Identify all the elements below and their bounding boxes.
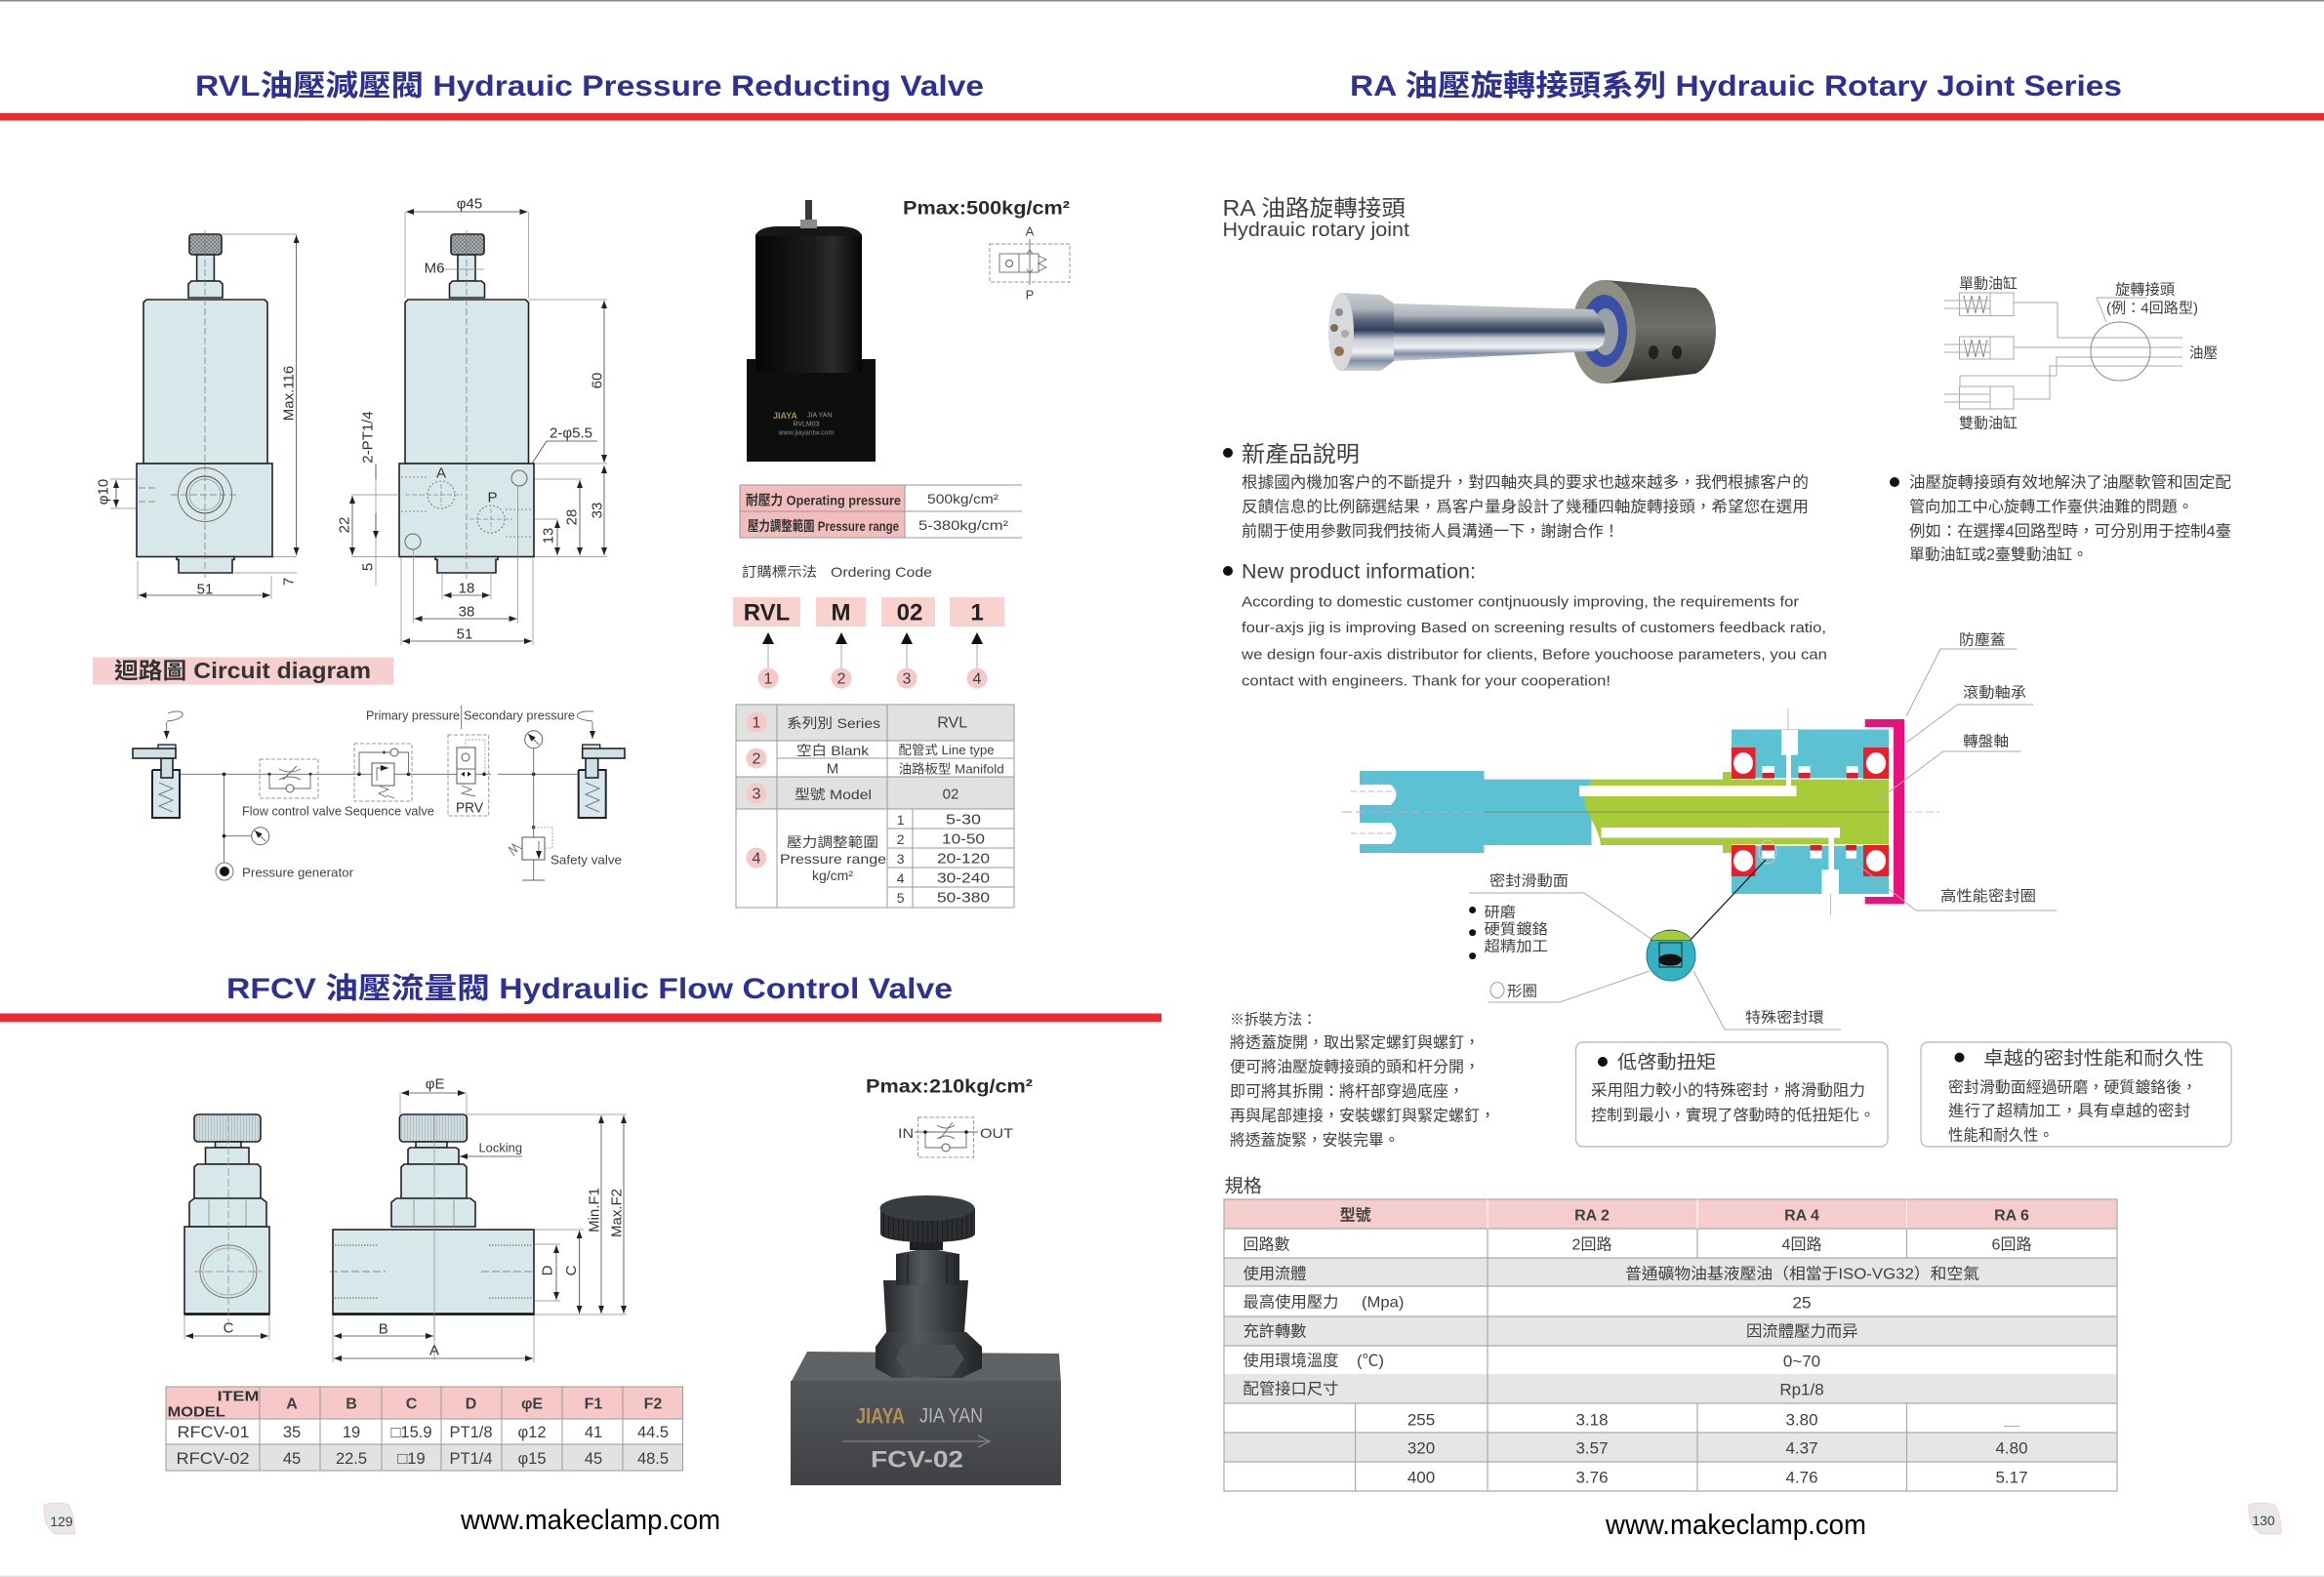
- icon: RVL valve symbol: [990, 224, 1070, 303]
- table: RA specifications: 最高使用壓力: [1244, 1294, 1339, 1312]
- label: sequence valve: Sequence valve: [345, 804, 434, 819]
- diagram: rotary joint cross-section: [1342, 649, 2057, 1030]
- table: RFCV dimensions: φE: [521, 1396, 543, 1413]
- panel: sealing and durability: 密封滑動面經過研磨，硬質鍍鉻後，: [1948, 1078, 2197, 1096]
- panel: low starting torque: 采用阻力較小的特殊密封，將滑動阻力: [1591, 1082, 1865, 1100]
- table: RFCV dimensions: [166, 1387, 683, 1471]
- icon: flow valve symbol: [898, 1117, 1014, 1157]
- circuit diagram: [133, 706, 625, 880]
- dim: A: A: [429, 1343, 439, 1359]
- heading: specifications: 規格: [1225, 1176, 1262, 1197]
- panel: low starting torque: 控制到最小，實現了啓動時的低扭矩化。: [1591, 1106, 1875, 1124]
- list: surface finishes: 研磨: [1484, 905, 1516, 921]
- icon: flow valve symbol: OUT: [980, 1125, 1014, 1141]
- table: RFCV dimensions: φ12: [517, 1424, 547, 1441]
- table: ordering code details: [736, 705, 1014, 908]
- drawing: RVL front view: [96, 230, 297, 599]
- icon: safety valve: [509, 748, 552, 880]
- table: ordering code details: 10-50: [942, 831, 985, 848]
- label: primary pressure: Primary pressure: [366, 708, 460, 723]
- table: RA specifications: 0~70: [1783, 1352, 1820, 1370]
- label: Locking: Locking: [478, 1141, 522, 1155]
- table: ordering code details: 02: [943, 787, 958, 803]
- table: RA specifications: —: [2004, 1418, 2019, 1435]
- callout: O-ring: [1490, 983, 1537, 1000]
- dim: Min.F1: Min.F1: [586, 1188, 603, 1233]
- table: RFCV dimensions: RFCV-02: [176, 1450, 250, 1468]
- label: PRV: PRV: [456, 800, 483, 817]
- schematic: cylinders and rotary joint: [1944, 275, 2218, 432]
- dim: 18: 18: [459, 581, 474, 597]
- dim: 2-phi 5.5: 2-φ5.5: [550, 425, 592, 442]
- photo: black RVL valve: www.jiayantw.com: [778, 430, 835, 437]
- text block: disassembly method: 將透蓋旋緊，安裝完畢。: [1230, 1132, 1400, 1150]
- table: RA specifications: 3.76: [1575, 1469, 1609, 1487]
- photo: FCV-02 flow control valve: JIAYA: [856, 1404, 905, 1429]
- table: ordering code details: 4: [753, 851, 761, 868]
- panel: sealing and durability: [1921, 1042, 2231, 1147]
- heading: Pmax 210: Pmax:210kg/cm²: [866, 1077, 1033, 1098]
- text block: disassembly method: 將透蓋旋開，取出緊定螺釘與螺釘，: [1230, 1034, 1480, 1052]
- table: RA specifications: RA 4: [1784, 1208, 1819, 1225]
- page number 129: [44, 1503, 74, 1534]
- table: pressure ratings: 5-380kg/cm²: [918, 517, 1008, 533]
- detail: seal circle: [1647, 930, 1695, 981]
- table: RFCV dimensions: F2: [644, 1396, 662, 1413]
- table: ordering code details: 4: [897, 870, 905, 886]
- callout: rotary shaft: 轉盤軸: [1963, 733, 2009, 749]
- dim: phi E: φE: [426, 1076, 444, 1093]
- table: pressure ratings: [740, 485, 1022, 538]
- icon: flow valve symbol: IN: [898, 1125, 914, 1141]
- drawing: RFCV front view: [184, 1114, 269, 1340]
- label: pressure generator: Pressure generator: [242, 866, 354, 880]
- table: ordering code details: 油路板型 Manifold: [899, 762, 1004, 777]
- table: ordering code details: 3: [753, 787, 761, 803]
- red header bar: [0, 113, 2324, 121]
- table: RFCV dimensions: □15.9: [390, 1424, 432, 1441]
- heading: RA rotary joint: [1222, 195, 1409, 241]
- table: RFCV dimensions: ITEM: [218, 1389, 259, 1405]
- label: hydraulic pressure: 油壓: [2189, 345, 2218, 362]
- icon: PRV valve: [448, 735, 489, 816]
- table: RFCV dimensions: PT1/4: [449, 1450, 493, 1468]
- label: single acting cylinder: 單動油缸: [1959, 275, 2018, 293]
- table: RFCV dimensions: 45: [585, 1450, 602, 1468]
- table: ordering code details: 3: [897, 851, 905, 867]
- table: RA specifications: 4.80: [1995, 1439, 2028, 1458]
- table: ordering code details: 50-380: [937, 890, 990, 907]
- page number 129: 129: [50, 1514, 73, 1529]
- heading: ordering code: 訂購標示法: [742, 564, 817, 580]
- ordering code boxes: [733, 597, 1004, 627]
- table: RA specifications: 使用流體: [1244, 1265, 1306, 1282]
- photo: black RVL valve: JIAYA: [773, 411, 797, 421]
- table: RFCV dimensions: 41: [585, 1424, 602, 1441]
- photo: rotary joint: [1328, 280, 1716, 384]
- table: RA specifications: 25: [1793, 1294, 1811, 1313]
- icon: pressure gauges: [252, 731, 543, 845]
- icon: left clamp cylinder: [133, 711, 183, 818]
- text block: new product information English: According to domestic customer contjnuously improving, the requirements for: [1242, 594, 1799, 611]
- ordering code boxes: 02: [897, 600, 922, 627]
- table: ordering code details: 5: [897, 890, 905, 906]
- ordering code boxes: M: [832, 600, 851, 627]
- label: rotary joint: 旋轉接頭: [2115, 282, 2175, 299]
- callout: special seal ring: 特殊密封環: [1745, 1010, 1824, 1027]
- callout: seal sliding surface: 密封滑動面: [1489, 873, 1569, 890]
- table: ordering code details: 1: [753, 715, 761, 732]
- panel: sealing and durability: 性能和耐久性。: [1948, 1127, 2054, 1145]
- text block: disassembly method: ※拆裝方法：: [1230, 1012, 1317, 1029]
- website link left: www.makeclamp.com: [460, 1505, 720, 1536]
- table: RA specifications: RA 2: [1574, 1208, 1610, 1225]
- heading: ordering code: [742, 564, 932, 580]
- table: RA specifications: (℃): [1357, 1353, 1384, 1369]
- dim: phi 45: φ45: [457, 196, 482, 213]
- dim: 13: 13: [541, 528, 556, 544]
- text block: disassembly method: 便可將油壓旋轉接頭的頭和杆分開，: [1230, 1059, 1480, 1076]
- port label P: P: [487, 490, 498, 506]
- table: RA specifications: 4.76: [1785, 1469, 1818, 1487]
- text block: new product description Chinese: 新產品說明: [1242, 441, 1360, 466]
- dim: 5: 5: [359, 563, 377, 571]
- heading: Pmax 500: Pmax:500kg/cm²: [903, 199, 1070, 220]
- table: RA specifications: 4.37: [1785, 1439, 1818, 1458]
- table: RFCV dimensions: A: [286, 1396, 298, 1413]
- ordering code arrows and numbered circles: 3: [903, 671, 912, 688]
- table: ordering code details: kg/cm²: [812, 868, 853, 883]
- table: RA specifications: 2回路: [1572, 1235, 1611, 1253]
- label: double acting cylinder: 雙動油缸: [1959, 415, 2018, 432]
- dim: 2-PT1/4: 2-PT1/4: [359, 411, 377, 464]
- icon: RVL valve symbol: A: [1026, 224, 1035, 239]
- text block: disassembly method: 再與尾部連接，安裝螺釘與緊定螺釘，: [1230, 1108, 1495, 1125]
- dim: 33: 33: [590, 503, 605, 518]
- table: RFCV dimensions: 35: [283, 1424, 301, 1441]
- table: ordering code details: 30-240: [937, 870, 990, 887]
- table: pressure ratings: 500kg/cm²: [927, 491, 999, 506]
- icon: pressure generator: [216, 863, 233, 880]
- text block: new product information English: New product information:: [1242, 561, 1476, 584]
- text block: hydraulic joint benefit: 例如：在選擇4回路型時，可分別用于控制4臺: [1909, 523, 2231, 541]
- table: RA specifications: 400: [1407, 1469, 1435, 1487]
- dim: 51 lower: 51: [457, 627, 472, 643]
- table: RA specifications: 使用環境溫度: [1244, 1351, 1339, 1369]
- text block: new product description Chinese: 前關于使用參數同我們技術人員溝通一下，謝謝合作！: [1242, 523, 1619, 541]
- table: ordering code details: 配管式 Line type: [899, 743, 995, 757]
- table: RA specifications: 5.17: [1995, 1469, 2028, 1487]
- table: ordering code details: 2: [753, 751, 761, 768]
- table: RA specifications: 6回路: [1992, 1235, 2031, 1253]
- table: pressure ratings: 耐壓力 Operating pressure: [746, 493, 901, 508]
- dim: Max.116: Max.116: [281, 366, 297, 421]
- table: RFCV dimensions: F1: [585, 1396, 602, 1413]
- table: ordering code details: 空白 Blank: [796, 743, 870, 758]
- photo: FCV-02 flow control valve: [791, 1195, 1061, 1485]
- photo: black RVL valve: JIA YAN: [807, 413, 832, 420]
- photo: black RVL valve: RVLM03: [793, 422, 820, 428]
- text block: new product description Chinese: 反饋信息的比例篩選結果，爲客户量身設計了幾種四軸旋轉接頭，希望您在選用: [1242, 498, 1809, 516]
- text block: new product information English: we design four-axis distributor for clients, Before youchoose parameters, you can: [1241, 647, 1827, 664]
- icon: sequence valve: [354, 744, 412, 801]
- heading: RA rotary joint: RA 油路旋轉接頭: [1222, 195, 1406, 221]
- icon: right clamp cylinder: [577, 711, 625, 818]
- ordering code boxes: RVL: [744, 600, 790, 627]
- text block: disassembly method: 即可將其拆開：將杆部穿過底座，: [1230, 1083, 1464, 1101]
- title: RVL pressure reducing valve: RVL油壓減壓閥 Hydrauic Pressure Reducting Valve: [195, 70, 984, 102]
- text block: disassembly method: [1230, 1012, 1495, 1150]
- table: RFCV dimensions: 45: [283, 1450, 301, 1468]
- dim: Max.F2: Max.F2: [609, 1189, 625, 1237]
- table: RA specifications: 型號: [1340, 1207, 1371, 1225]
- panel: low starting torque: [1576, 1042, 1888, 1147]
- table: RA specifications: RA 6: [1994, 1208, 2029, 1225]
- table: RFCV dimensions: 22.5: [336, 1450, 367, 1468]
- photo: FCV-02 flow control valve: FCV-02: [871, 1447, 963, 1474]
- dim: 51: 51: [197, 582, 213, 598]
- port label A: A: [436, 465, 446, 482]
- dim: phi 10: φ10: [96, 479, 111, 505]
- table: ordering code details: 1: [897, 812, 905, 828]
- dim: M6: M6: [425, 261, 444, 277]
- table: ordering code details: Pressure range: [780, 851, 886, 867]
- drawing: RFCV side view: [330, 1076, 627, 1362]
- label: secondary pressure: Secondary pressure: [464, 708, 575, 723]
- ordering code boxes: 1: [970, 600, 984, 627]
- page number 130: [2249, 1503, 2281, 1534]
- table: ordering code details: 20-120: [937, 851, 990, 868]
- title: RA rotary joint series: RA 油壓旋轉接頭系列 Hydrauic Rotary Joint Series: [1350, 70, 2122, 102]
- panel: sealing and durability: 進行了超精加工，具有卓越的密封: [1948, 1103, 2190, 1120]
- photo: FCV-02 flow control valve: JIA YAN: [919, 1405, 983, 1428]
- table: ordering code details: 5-30: [946, 812, 981, 829]
- table: RA specifications: 320: [1407, 1439, 1435, 1458]
- table: RA specifications: 3.80: [1785, 1411, 1818, 1430]
- heading: RA rotary joint: Hydrauic rotary joint: [1222, 220, 1409, 241]
- drawing: RVL side view: [336, 196, 607, 645]
- label: flow control valve: Flow control valve: [242, 804, 342, 819]
- table: RFCV dimensions: φ15: [517, 1450, 547, 1468]
- table: ordering code details: 型號 Model: [795, 787, 872, 802]
- table: RFCV dimensions: 19: [343, 1424, 360, 1441]
- callout: O-ring: 形圈: [1507, 984, 1537, 1000]
- list: surface finishes: 超精加工: [1484, 939, 1548, 955]
- icon: flow control valve: [260, 759, 318, 798]
- table: RA specifications: [1224, 1199, 2117, 1491]
- table: RFCV dimensions: D: [466, 1396, 476, 1413]
- dim: 7: 7: [281, 578, 297, 586]
- heading: circuit diagram: 迴路圖 Circuit diagram: [114, 658, 371, 683]
- dim: 22: 22: [336, 517, 353, 533]
- dim: B: B: [379, 1321, 388, 1338]
- ordering code arrows and numbered circles: 2: [837, 671, 846, 688]
- table: RFCV dimensions: 48.5: [637, 1450, 669, 1468]
- label: safety valve: Safety valve: [550, 853, 622, 868]
- text block: new product information English: four-axjs jig is improving Based on screening results of customers feedback ratio,: [1242, 620, 1826, 636]
- dim: D: D: [539, 1265, 556, 1275]
- text block: new product information English: [1223, 561, 1827, 690]
- table: RFCV dimensions: □19: [397, 1450, 426, 1468]
- callout: high performance seal: 高性能密封圈: [1940, 888, 2036, 905]
- table: RFCV dimensions: MODEL: [168, 1403, 225, 1420]
- page number 130: 130: [2252, 1513, 2275, 1528]
- table: RFCV dimensions: C: [406, 1396, 418, 1413]
- ordering code arrows and numbered circles: 1: [764, 671, 773, 688]
- table: RA specifications: Rp1/8: [1779, 1381, 1824, 1399]
- text block: new product description Chinese: [1223, 441, 1809, 541]
- dim: C height: C: [563, 1265, 580, 1275]
- dim: 38: 38: [459, 604, 474, 621]
- title: RFCV flow control valve: RFCV 油壓流量閥 Hydraulic Flow Control Valve: [226, 973, 953, 1005]
- text block: hydraulic joint benefit: 管向加工中心旋轉工作臺供油難的問題。: [1909, 498, 2193, 516]
- table: ordering code details: 系列別 Series: [787, 715, 880, 731]
- panel: low starting torque: 低啓動扭矩: [1617, 1052, 1716, 1073]
- table: RFCV dimensions: PT1/8: [449, 1424, 493, 1441]
- website link right: www.makeclamp.com: [1605, 1510, 1866, 1541]
- label: 4-circuit example: (例：4回路型): [2106, 301, 2198, 317]
- dim: 60: 60: [590, 373, 605, 388]
- text block: hydraulic joint benefit: [1890, 473, 2231, 564]
- panel: sealing and durability: 卓越的密封性能和耐久性: [1983, 1048, 2204, 1070]
- table: RFCV dimensions: B: [346, 1396, 357, 1413]
- dim: 28: 28: [564, 509, 580, 525]
- heading: ordering code: Ordering Code: [831, 564, 932, 580]
- table: pressure ratings: 壓力調整範圍 Pressure range: [748, 518, 899, 534]
- table: RA specifications: 普通礦物油基液壓油（相當于ISO-VG32）和空氣: [1625, 1264, 1979, 1282]
- table: RFCV dimensions: 44.5: [637, 1424, 669, 1441]
- text block: new product description Chinese: 根據國內機加客户的不斷提升，對四軸夾具的要求也越來越多，我們根據客户的: [1242, 474, 1809, 492]
- table: RA specifications: 3.18: [1575, 1411, 1609, 1430]
- ordering code arrows and numbered circles: 4: [973, 671, 982, 688]
- table: RA specifications: 配管接口尺寸: [1244, 1380, 1339, 1398]
- table: RA specifications: 3.57: [1575, 1439, 1609, 1458]
- icon: RVL valve symbol: P: [1026, 288, 1034, 303]
- text block: hydraulic joint benefit: 單動油缸或2臺雙動油缸。: [1909, 546, 2088, 564]
- text block: new product information English: contact with engineers. Thank for your cooperation!: [1242, 673, 1610, 690]
- table: ordering code details: 壓力調整範圍: [787, 834, 878, 850]
- list: surface finishes: [1469, 905, 1548, 959]
- table: RA specifications: 4回路: [1782, 1235, 1821, 1253]
- table: ordering code details: RVL: [937, 715, 967, 732]
- table: RA specifications: 因流體壓力而异: [1746, 1322, 1858, 1340]
- red section bar: [0, 1013, 1162, 1022]
- callout: rolling bearing: 滾動軸承: [1963, 685, 2026, 702]
- table: ordering code details: M: [827, 761, 838, 778]
- table: RA specifications: 回路數: [1244, 1235, 1290, 1253]
- table: RA specifications: (Mpa): [1362, 1295, 1404, 1312]
- callout: dust cover: 防塵蓋: [1959, 631, 2006, 649]
- table: RA specifications: 充許轉數: [1244, 1322, 1306, 1340]
- table: ordering code details: 2: [897, 831, 905, 847]
- list: surface finishes: 硬質鍍鉻: [1484, 920, 1548, 938]
- table: RA specifications: 255: [1407, 1411, 1435, 1430]
- dim: C width: C: [224, 1320, 234, 1337]
- table: RFCV dimensions: RFCV-01: [178, 1424, 250, 1441]
- photo: black RVL valve: [747, 200, 876, 462]
- text block: hydraulic joint benefit: 油壓旋轉接頭有效地解決了油壓軟管和固定配: [1909, 473, 2231, 492]
- ordering code arrows and numbered circles: [757, 632, 988, 689]
